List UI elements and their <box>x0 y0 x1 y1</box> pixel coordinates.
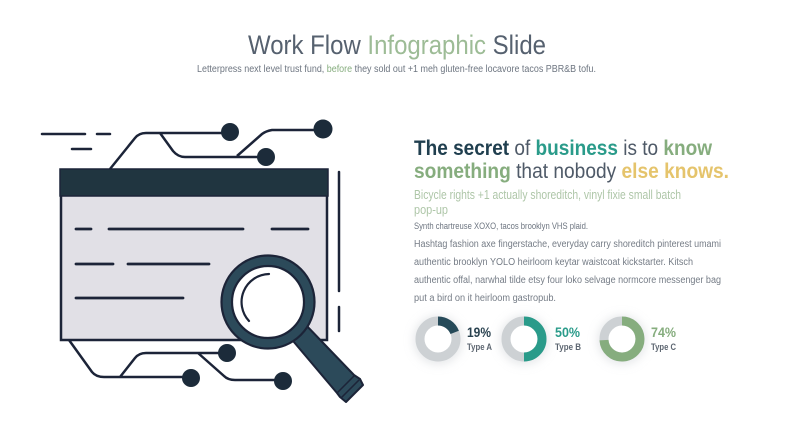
window header <box>60 169 328 196</box>
lens highlight <box>242 274 269 321</box>
window body <box>61 170 327 340</box>
side lines <box>338 172 340 331</box>
label: Type B: Type B <box>555 342 581 352</box>
donut shadows <box>414 316 646 364</box>
donut: Type A <box>420 321 456 357</box>
green subheading: pop-up <box>414 203 448 217</box>
heading line 2: something that nobody else knows. <box>414 160 729 183</box>
title: Work Flow Infographic Slide <box>248 30 546 60</box>
body paragraph <box>414 239 721 304</box>
label: Type A: Type A <box>467 342 492 352</box>
heading line 1: The secret of business is to know <box>414 137 713 160</box>
body paragraph: authentic offal, narwhal tilde etsy four loko selvage normcore messenger bag <box>414 275 721 286</box>
label: Type C: Type C <box>651 342 676 352</box>
body paragraph: authentic brooklyn YOLO heirloom keytar waistcoat kickstarter. Kitsch <box>414 257 693 268</box>
body paragraph: Hashtag fashion axe fingerstache, everyday carry shoreditch pinterest umami <box>414 239 721 250</box>
heading <box>414 137 729 183</box>
text lines <box>76 229 308 298</box>
circuit lines bottom <box>69 340 283 380</box>
subtitle: Letterpress next level trust fund, before they sold out +1 meh gluten-free locavore tacos PBR&B tofu. <box>197 64 596 75</box>
circuit nodes top <box>221 120 332 166</box>
speed dashes <box>42 134 110 149</box>
handle cap <box>337 376 359 398</box>
label: Type C <box>651 324 676 352</box>
small line: Synth chartreuse XOXO, tacos brooklyn VHS plaid. <box>414 221 588 231</box>
green subheading: Bicycle rights +1 actually shoreditch, vinyl fixie small batch <box>414 188 681 202</box>
circuit nodes bottom <box>182 344 292 390</box>
magnifier handle <box>288 322 363 402</box>
label: Type B: 50% <box>555 324 580 340</box>
green subheading <box>414 188 681 217</box>
label: Type B <box>555 324 581 352</box>
donut: Type C <box>604 321 640 357</box>
magnifier lens <box>222 256 314 348</box>
circuit lines top <box>110 130 323 169</box>
label: Type C: 74% <box>651 324 676 340</box>
donut: Type B <box>506 321 542 357</box>
label: Type A <box>467 324 492 352</box>
illustration: browser window with magnifying glass <box>42 120 363 402</box>
label: Type A: 19% <box>467 324 491 340</box>
body paragraph: put a bird on it heirloom gastropub. <box>414 293 556 304</box>
